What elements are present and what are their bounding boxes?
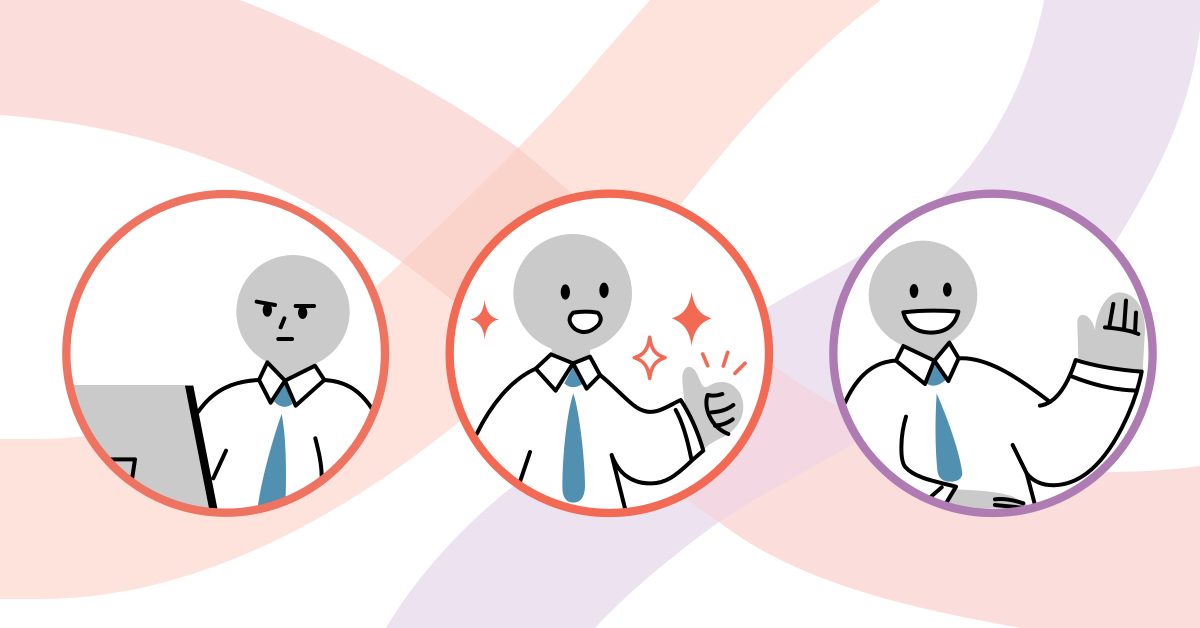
sparkle: right [672,292,712,346]
head: smiling face [513,234,632,365]
sparkle: left [470,299,499,339]
ring: purple [833,194,1153,513]
panel: worker at laptop [63,194,385,517]
panel: worker waving [833,194,1153,513]
sparkle: outlined [634,337,665,378]
necktie [935,393,962,482]
ribbon: peach [0,0,881,599]
ring: coral [66,194,385,513]
hand: raised palm [1077,292,1145,372]
necktie [562,393,585,503]
shirt and collar [477,354,703,508]
panel: worker giving thumbs up [450,194,769,513]
head: grinning face [869,241,977,362]
hand: thumbs up [682,367,743,449]
laptop [74,385,218,508]
head: serious face [236,255,350,383]
ribbon: purple [386,0,1200,628]
shirt and collar [198,362,372,478]
ring: red-orange [450,194,769,513]
shine rays [703,352,745,373]
shirt and collar [845,343,1142,505]
necktie [258,414,286,505]
ribbon overlap: pink and peach [402,148,572,302]
hand: lower resting [949,490,1028,508]
